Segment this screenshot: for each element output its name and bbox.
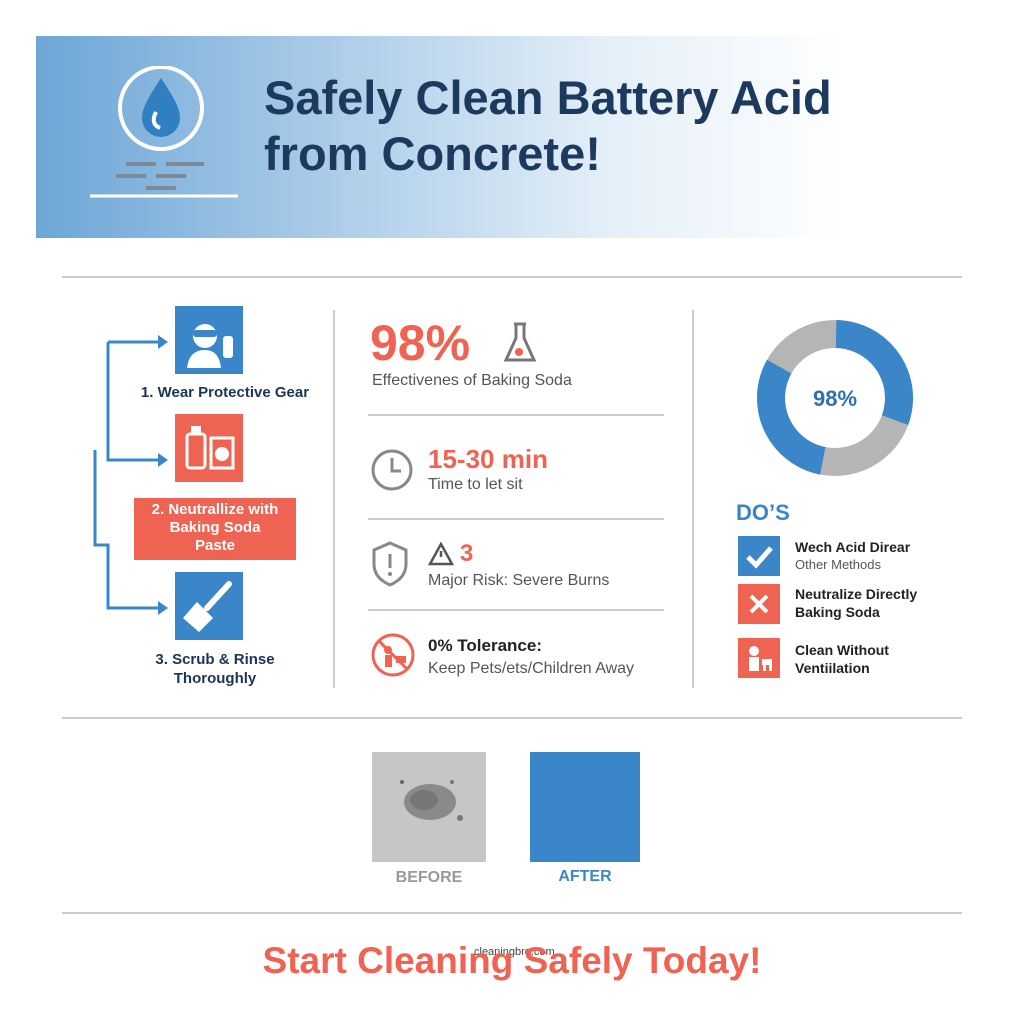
stat: major risk	[372, 540, 609, 589]
after image: AFTER	[558, 868, 612, 885]
stat: 98%	[370, 315, 572, 389]
step 2 label: 2. Neutrallize with	[152, 501, 278, 518]
DO'S list: Other Methods	[795, 557, 881, 572]
stat: major risk: 3	[460, 540, 473, 567]
title: Safely Clean Battery Acid	[264, 71, 832, 124]
step 2 label	[134, 498, 296, 560]
stat: 15-30 min: 15-30 min	[428, 444, 548, 474]
before image	[372, 752, 486, 886]
item: cross	[738, 584, 780, 624]
call to action: Start Cleaning Safely Today!	[263, 940, 761, 981]
icon: bottle and box	[175, 414, 243, 482]
DO'S list: Ventiilation	[795, 660, 870, 676]
before image: BEFORE	[396, 869, 462, 886]
donut chart: 98%	[813, 386, 857, 411]
step 1 label: 1. Wear Protective Gear	[141, 384, 309, 401]
stat: 15-30 min: Time to let sit	[428, 476, 523, 493]
DO'S list: Neutralize Directly	[795, 586, 917, 602]
icon: protective gear	[175, 306, 243, 374]
stats panel	[368, 315, 664, 677]
stat: tolerance: 0% Tolerance:	[428, 636, 542, 655]
item: check	[738, 536, 780, 576]
flow steps panel	[94, 306, 309, 687]
title: from Concrete!	[264, 127, 601, 180]
title	[264, 71, 832, 180]
step 3 label: Thoroughly	[174, 670, 256, 687]
stat: major risk: Major Risk: Severe Burns	[428, 572, 609, 589]
watermark: cleaningbro.com	[474, 946, 555, 958]
arrows	[94, 335, 168, 615]
step 2 label: Paste	[195, 537, 235, 554]
stat: 15-30 min	[372, 444, 548, 493]
stat: 98%: 98%	[370, 315, 470, 371]
DO'S list: Clean Without	[795, 642, 889, 658]
DO'S list	[736, 500, 917, 678]
step 3 label	[155, 651, 275, 687]
step 2 label: Baking Soda	[170, 519, 260, 536]
item: kids	[738, 638, 780, 678]
step 3 label: 3. Scrub & Rinse	[155, 651, 275, 668]
stat: tolerance	[372, 634, 634, 677]
icon: water drop on concrete	[90, 66, 238, 198]
donut chart	[757, 320, 913, 476]
DO'S list: Wech Acid Direar	[795, 539, 910, 555]
DO'S list: Baking Soda	[795, 604, 880, 620]
stat: tolerance: Keep Pets/ets/Children Away	[428, 660, 634, 677]
DO'S list: DO’S	[736, 500, 790, 525]
stat: 98%: Effectivenes of Baking Soda	[372, 372, 572, 389]
after image	[530, 752, 640, 885]
header banner	[36, 36, 988, 238]
icon: brush	[175, 572, 243, 640]
